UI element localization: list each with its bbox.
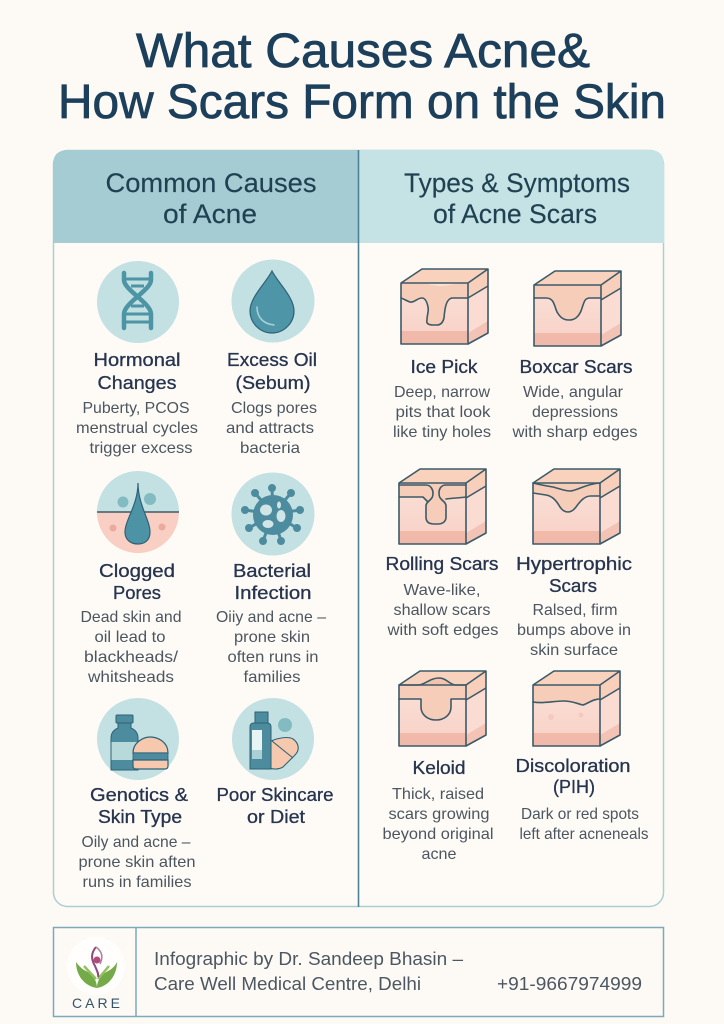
cause: hormonal changes <box>76 261 198 457</box>
cause: excess oil: and attracts <box>226 420 314 437</box>
cause: poor skincare or diet: or Diet <box>247 807 305 827</box>
cause: clogged pores <box>80 471 182 686</box>
scar: keloid: beyond original <box>382 826 494 843</box>
scar: hypertrophic: Hypertrophic <box>516 554 632 574</box>
cause: excess oil: bacteria <box>240 440 300 457</box>
scar: hypertrophic: Ralsed, firm <box>532 602 618 619</box>
footer <box>54 927 664 1017</box>
cause: hormonal changes: menstrual cycles <box>76 420 198 437</box>
cause: poor skincare or diet: Poor Skincare <box>216 785 334 805</box>
cause: genetics and skin type: runs in families <box>82 874 192 891</box>
cause: clogged pores: Pores <box>113 583 161 603</box>
cause: bacterial infection: prone skin <box>234 629 310 646</box>
scar: boxcar: Boxcar Scars <box>520 357 632 377</box>
cause: bacterial infection <box>216 472 326 686</box>
cause: bacterial infection: families <box>244 669 300 686</box>
cause: clogged pores: oil lead to <box>94 629 166 646</box>
cause: hormonal changes: Puberty, PCOS <box>82 400 190 417</box>
scar: hypertrophic: Scars <box>549 576 597 596</box>
footer credit: Infographic by Dr. Sandeep Bhasin – <box>154 949 463 969</box>
panel header: scars <box>359 150 664 243</box>
scar: hypertrophic: skin surface <box>530 642 618 659</box>
scar: ice pick: like tiny holes <box>393 424 491 441</box>
title <box>58 25 666 129</box>
scar: hypertrophic: bumps above in <box>517 622 631 639</box>
logo: care <box>67 937 125 1011</box>
title: How Scars Form on the Skin <box>58 76 666 129</box>
scar: keloid: Thick, raised <box>392 786 484 803</box>
scar: discoloration: left after acneneals <box>520 826 648 843</box>
scar: boxcar: with sharp edges <box>511 424 638 441</box>
footer credit: Care Well Medical Centre, Delhi <box>154 974 421 994</box>
scar: boxcar: Wide, angular <box>523 384 624 401</box>
icon: skin block with wide depression <box>534 271 621 346</box>
scar: discoloration: Discoloration <box>516 756 630 776</box>
cause: excess oil: (Sebum) <box>236 373 310 393</box>
scar: ice pick: pits that look <box>396 404 492 421</box>
panel header: scars: Types & Symptoms <box>404 168 630 198</box>
icon: bottle and pill <box>232 698 314 780</box>
icon: bottle and burger <box>97 698 179 780</box>
footer credit <box>154 949 463 994</box>
cause: excess oil: Clogs pores <box>231 400 317 417</box>
title: What Causes Acne& <box>136 25 590 78</box>
panel header: causes: Common Causes <box>106 168 316 198</box>
icon: skin block with narrow pit <box>401 269 488 344</box>
cause: clogged pores: Clogged <box>99 561 175 581</box>
panel header: scars: of Acne Scars <box>433 199 597 229</box>
phone number: +91-9667974999 <box>497 974 642 994</box>
scar: keloid: Keloid <box>412 758 466 778</box>
cause: hormonal changes: Changes <box>98 373 176 393</box>
scar: ice pick: Deep, narrow <box>394 384 490 401</box>
cause: clogged pores: blackheads/ <box>84 649 179 666</box>
scar: hypertrophic <box>516 469 632 659</box>
cause: genetics and skin type <box>78 698 196 891</box>
icon: pore cross-section <box>97 471 179 553</box>
main panel <box>53 150 664 907</box>
cause: genetics and skin type: prone skin aften <box>78 854 196 871</box>
cause: clogged pores: whitsheads <box>87 669 174 686</box>
scar: boxcar: depressions <box>532 404 618 421</box>
scar: ice pick: Ice Pick <box>410 357 479 377</box>
cause: excess oil: Excess Oil <box>227 350 317 370</box>
cause: bacterial infection: Infection <box>234 583 312 603</box>
icon: skin block with flat surface <box>533 671 620 746</box>
scar: keloid <box>382 671 494 863</box>
scar: keloid: acne <box>422 846 457 863</box>
icon: skin block with raised bump <box>533 469 620 544</box>
scar: rolling: with soft edges <box>386 622 498 639</box>
icon: oil drop <box>232 260 314 342</box>
cause: genetics and skin type: Genotics & <box>90 785 188 805</box>
scar: rolling: Rolling Scars <box>386 554 498 574</box>
scar: rolling: shallow scars <box>394 602 490 619</box>
scar: ice pick <box>393 269 492 441</box>
scar: discoloration: (PIH) <box>553 777 595 797</box>
cause: genetics and skin type: Oily and acne – <box>82 834 191 851</box>
scar: discoloration: Dark or red spots <box>521 806 639 823</box>
panel header: causes <box>53 150 358 243</box>
cause: clogged pores: Dead skin and <box>80 609 182 626</box>
cause: bacterial infection: Oiiy and acne – <box>216 609 326 626</box>
cause: hormonal changes: trigger excess <box>90 440 192 457</box>
scar: rolling <box>386 469 498 639</box>
cause: genetics and skin type: Skin Type <box>98 807 182 827</box>
cause: excess oil <box>226 260 317 457</box>
icon: dna <box>97 261 179 343</box>
cause: poor skincare or diet <box>216 698 334 827</box>
icon: skin block with rounded channel <box>399 469 486 544</box>
cause: hormonal changes: Hormonal <box>94 350 180 370</box>
icon: bacterium <box>232 472 314 556</box>
cause: bacterial infection: often runs in <box>228 649 318 666</box>
cause: bacterial infection: Bacterial <box>233 561 311 581</box>
scar: boxcar <box>511 271 638 441</box>
scar: rolling: Wave-like, <box>404 582 480 599</box>
scar: keloid: scars growing <box>388 806 490 823</box>
panel header: causes: of Acne <box>163 199 257 229</box>
logo: care: CARE <box>72 995 120 1011</box>
scar: discoloration <box>516 671 648 843</box>
icon: skin block with dome scar <box>399 671 486 746</box>
